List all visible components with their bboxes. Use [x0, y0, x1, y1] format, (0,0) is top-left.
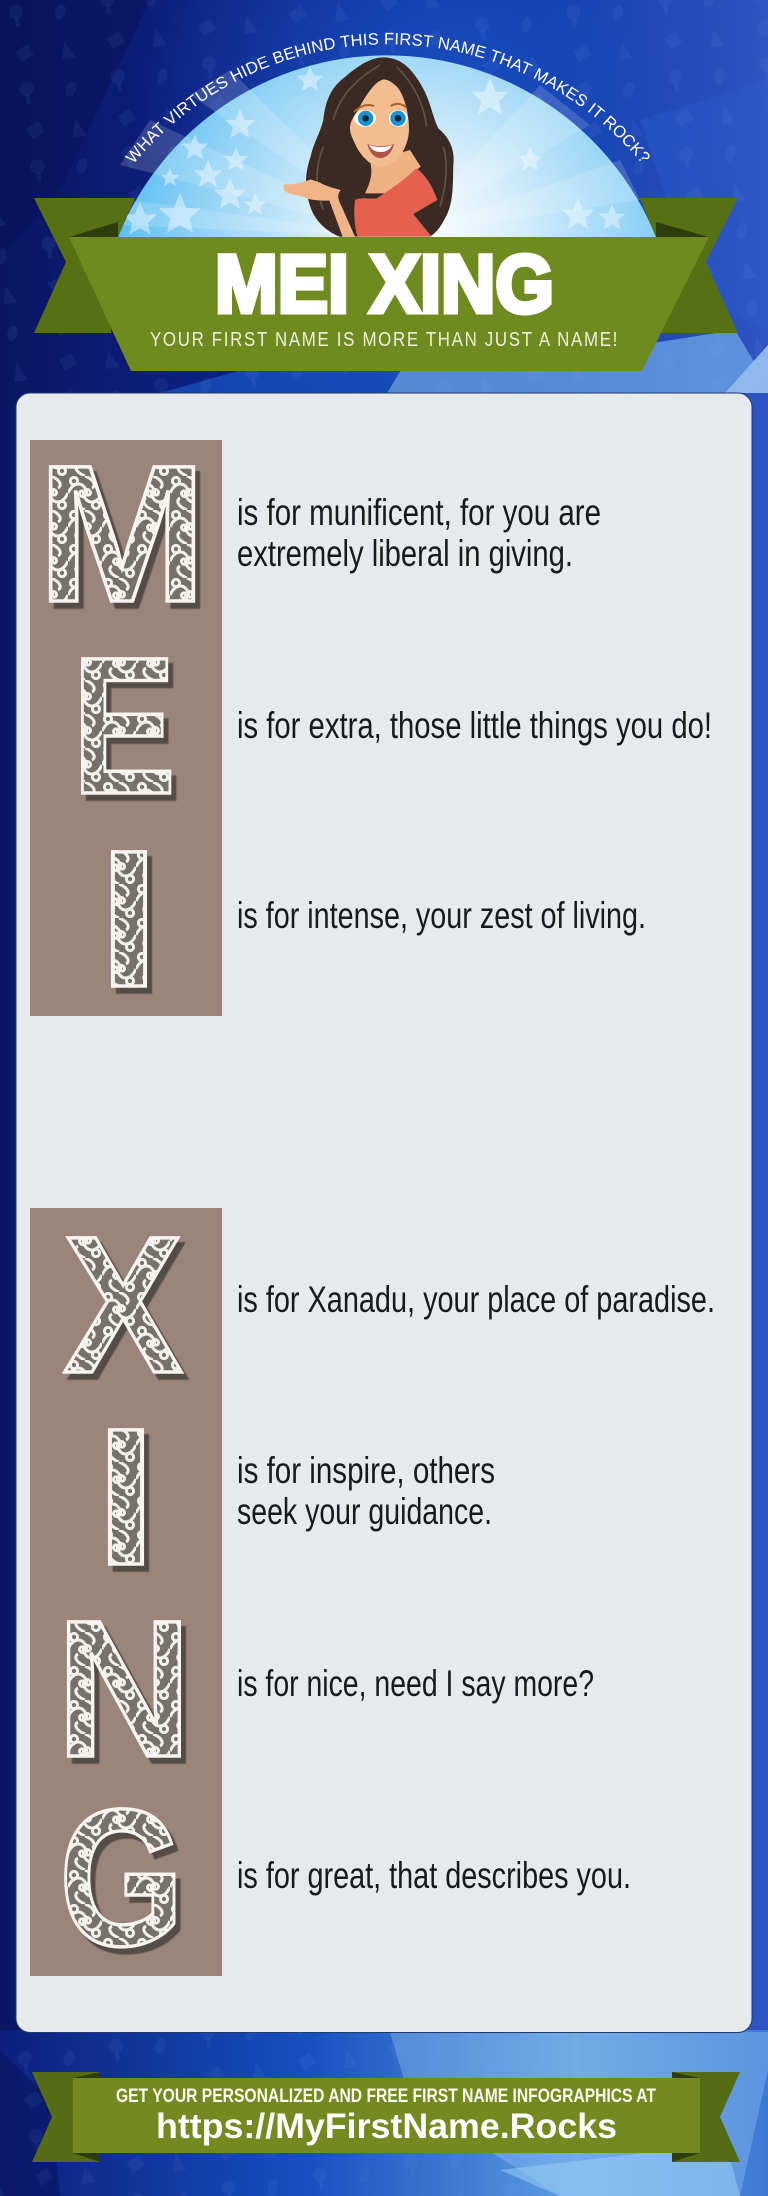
stars — [123, 66, 625, 235]
first name letter column — [30, 425, 222, 1028]
letter M: M — [37, 425, 207, 643]
hair — [306, 57, 454, 237]
eyebrows — [354, 104, 406, 112]
eyes — [354, 110, 376, 127]
shirt — [354, 168, 437, 237]
line M: is for munificent, for you are — [237, 492, 601, 533]
footer band — [73, 2078, 700, 2153]
character illustration — [283, 57, 454, 237]
hand and arm — [283, 179, 355, 237]
mouth — [367, 144, 394, 158]
header ribbon — [34, 198, 738, 371]
footer ribbon — [32, 2072, 740, 2162]
last name letter column — [30, 1196, 222, 1987]
letter X: X — [63, 1196, 183, 1414]
curved tagline: WHAT VIRTUES HIDE BEHIND THIS FIRST NAME THAT MAKES IT ROCK? — [124, 32, 650, 162]
line I: is for intense, your zest of living. — [237, 895, 646, 936]
name title: MEI XING — [215, 239, 554, 330]
hair highlights — [317, 65, 446, 210]
line I: seek your guidance. — [237, 1491, 492, 1532]
last name lines — [237, 1279, 715, 1896]
line G: is for great, that describes you. — [237, 1855, 631, 1896]
ribbon front — [69, 237, 709, 371]
letter I: I — [95, 1388, 157, 1606]
first name lines — [237, 492, 712, 936]
line I: is for inspire, others — [237, 1450, 495, 1491]
ribbon wings — [34, 198, 135, 333]
letter I: I — [98, 810, 160, 1028]
subtitle: YOUR FIRST NAME IS MORE THAN JUST A NAME! — [150, 329, 619, 351]
header hero dome — [118, 55, 656, 237]
footer call to action: GET YOUR PERSONALIZED AND FREE FIRST NAME INFOGRAPHICS AT — [116, 2086, 656, 2107]
face — [350, 79, 409, 167]
footer url: https://MyFirstName.Rocks — [156, 2107, 617, 2146]
line M — [237, 492, 601, 574]
panel: name card — [16, 393, 752, 2032]
line I — [237, 1450, 495, 1532]
line M: extremely liberal in giving. — [237, 533, 573, 574]
letter E: E — [72, 617, 176, 835]
footer wings — [32, 2072, 100, 2162]
neck — [365, 150, 421, 193]
letter G: G — [59, 1769, 184, 1987]
line N: is for nice, need I say more? — [237, 1663, 594, 1704]
letter N: N — [56, 1580, 192, 1798]
